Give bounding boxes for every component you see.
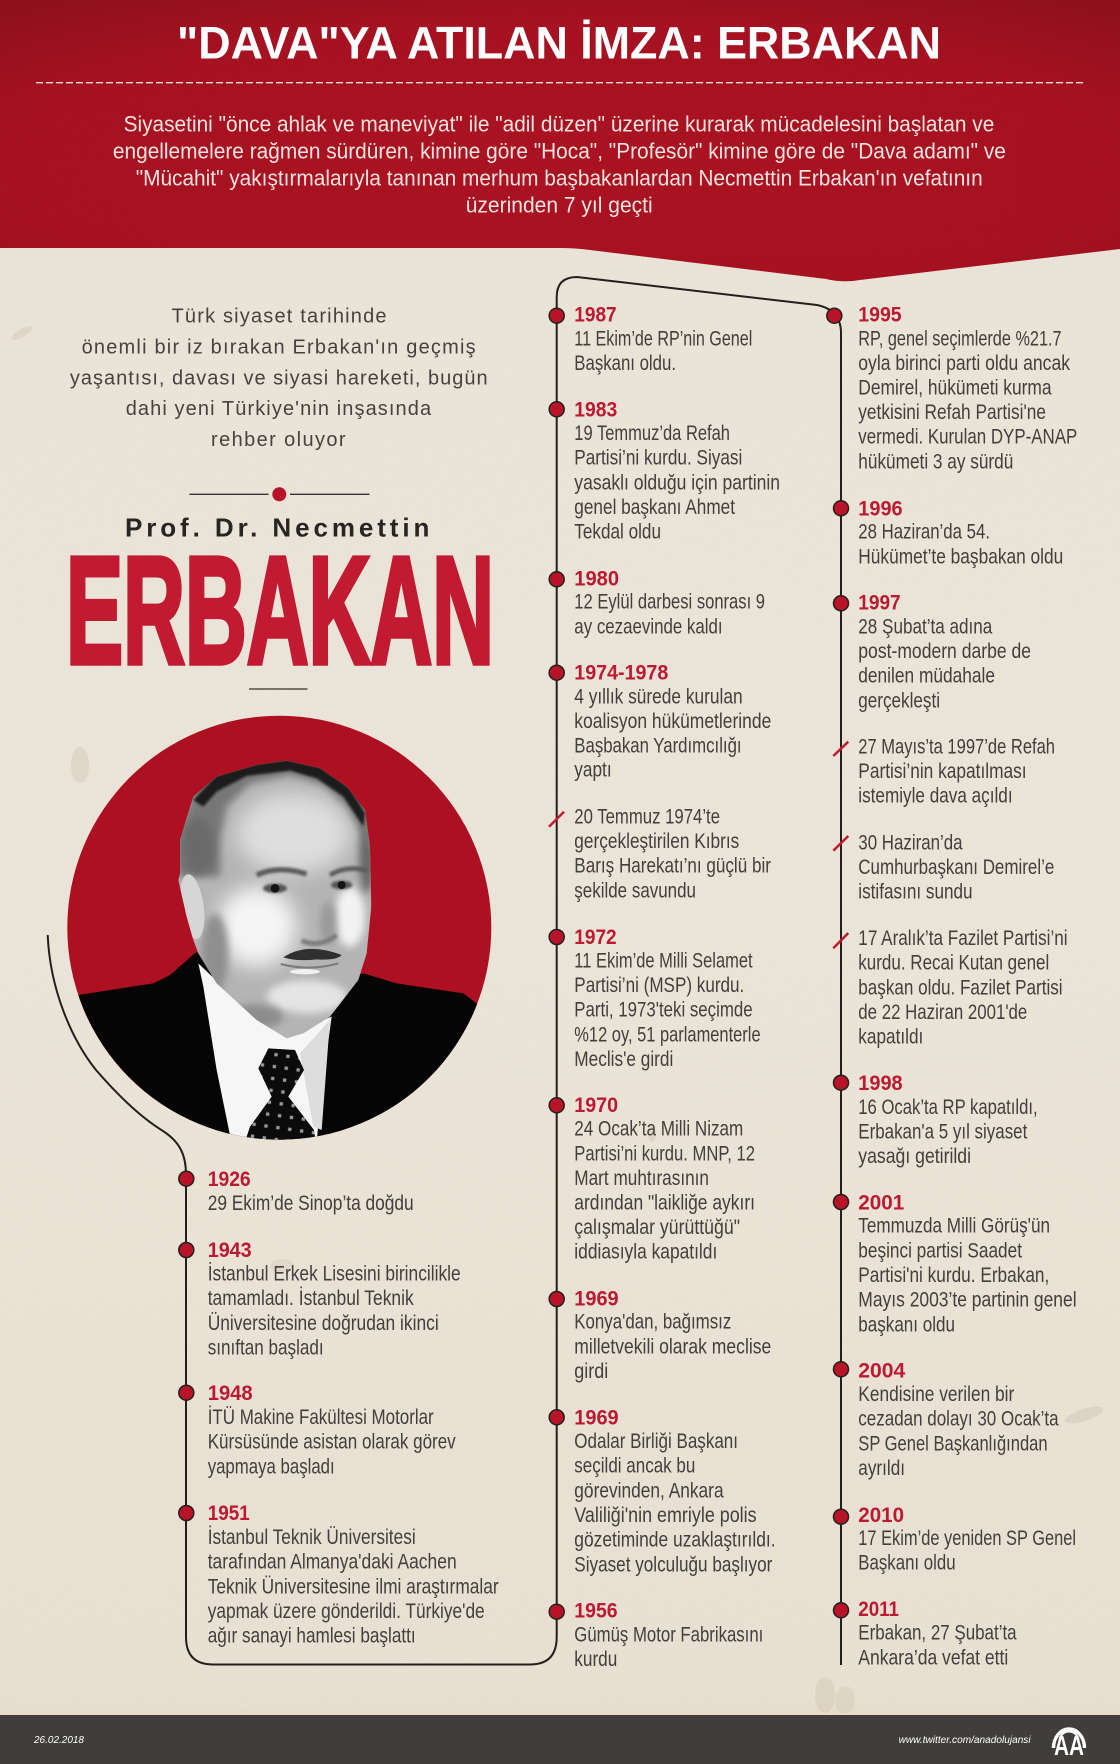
intro statement: Türk siyaset tarihinde (172, 305, 386, 327)
timeline entry: 1951: ağır sanayi hamlesi başlattı (208, 1625, 416, 1648)
timeline entry: 1996: 1996 (858, 497, 903, 520)
timeline entry: 1969 Konya (549, 1288, 771, 1383)
timeline entry: 20 Temmuz 1974: 20 Temmuz 1974’te (574, 805, 720, 828)
timeline entry: 1983: Tekdal oldu (574, 521, 661, 544)
timeline entry: 1995: Demirel, hükümeti kurma (858, 376, 1052, 399)
timeline entry: 1995: oyla birinci parti oldu ancak (858, 352, 1070, 375)
timeline entry: 1980: 1980 (574, 568, 619, 591)
portrait in red circle (67, 716, 492, 1140)
timeline entry: 1983: 19 Temmuz’da Refah (574, 422, 730, 445)
mouth (281, 963, 338, 968)
timeline entry: 1983 (549, 399, 780, 544)
timeline entry: 30 Haziran: 30 Haziran’da (858, 831, 963, 854)
timeline entry: 1948: Kürsüsünde asistan olarak görev (208, 1431, 456, 1454)
timeline entry: 1995: yetkisini Refah Partisi'ne (858, 401, 1046, 424)
ear (180, 874, 204, 939)
timeline entry: 2001: Temmuzda Milli Görüş'ün (858, 1215, 1050, 1238)
panel: timeline column 3 (827, 304, 1077, 1669)
timeline entry: 1995: 1995 (858, 304, 902, 327)
timeline entry: 1970: 24 Ocak’ta Milli Nizam (574, 1118, 743, 1141)
panel: timeline column 1 (179, 1168, 499, 1648)
timeline entry: 1972: 11 Ekim’de Milli Selamet (574, 949, 753, 972)
timeline entry: 1997: 28 Şubat’ta adına (858, 615, 993, 638)
timeline entry: 20 Temmuz 1974: şekilde savundu (574, 879, 696, 902)
timeline entry: 1951: tarafından Almanya'daki Aachen (208, 1551, 457, 1574)
intro statement (70, 305, 488, 451)
timeline entry: 27 Mayıs: istemiyle dava açıldı (858, 785, 1013, 808)
timeline entry: 20 Temmuz 1974 (549, 805, 771, 902)
timeline entry: 1996: 28 Haziran’da 54. (858, 521, 990, 544)
timeline entry: 2010: Başkanı oldu (858, 1552, 956, 1575)
icon: shirt (198, 963, 332, 1143)
intro statement: rehber oluyor (211, 429, 346, 451)
timeline entry: 1972: %12 oy, 51 parlamenterle (574, 1023, 761, 1046)
timeline entry: 1969 Konya: girdi (574, 1360, 608, 1383)
timeline entry: 1972: Partisi’ni (MSP) kurdu. (574, 974, 744, 997)
timeline entry: 2001: Partisi'ni kurdu. Erbakan, (858, 1264, 1049, 1287)
divider with red dot (189, 487, 370, 501)
timeline entry: 1995: RP, genel seçimlerde %21.7 (858, 327, 1062, 350)
timeline entry: 1951: 1951 (208, 1502, 250, 1525)
timeline entry: 17 Aralık: kurdu. Recai Kutan genel (858, 952, 1049, 975)
timeline entry: 1983: 1983 (574, 399, 617, 422)
timeline entry: 1951: Teknik Üniversitesine ilmi araştırmalar (208, 1575, 499, 1598)
timeline entry: 1983: yasaklı olduğu için partinin (574, 471, 780, 494)
timeline entry: 2001: beşinci partisi Saadet (858, 1239, 1022, 1262)
timeline entry: 1951: İstanbul Teknik Üniversitesi (208, 1526, 416, 1549)
icon: tie (246, 1048, 315, 1140)
timeline entry: 1998: yasağı getirildi (858, 1145, 971, 1168)
timeline entry: 1943: sınıftan başladı (208, 1336, 324, 1360)
timeline entry: 1943: Üniversitesine doğrudan ikinci (208, 1312, 439, 1335)
timeline entry: 1980: ay cezaevinde kaldı (574, 615, 723, 638)
timeline entry: 1969 Odalar Birliği: gözetiminde uzaklaştırıldı. (574, 1529, 776, 1552)
timeline entry: 1974-1978 (549, 662, 771, 782)
timeline entry: 27 Mayıs: 27 Mayıs’ta 1997’de Refah (858, 735, 1055, 758)
timeline entry: 1956: kurdu (574, 1648, 617, 1671)
timeline entry: 1972: Parti, 1973'teki seçimde (574, 999, 753, 1022)
timeline entry: 1995 (827, 304, 1077, 473)
intro paragraph (113, 112, 1006, 218)
timeline entry: 1997: denilen müdahale (858, 665, 995, 688)
timeline entry: 17 Aralık: kapatıldı (858, 1026, 923, 1049)
timeline entry: 30 Haziran (833, 831, 1054, 904)
timeline entry: 1969 Konya: 1969 (574, 1288, 619, 1310)
timeline entry: 1987 (549, 304, 752, 375)
timeline entry: 1943: 1943 (208, 1239, 252, 1262)
intro statement: dahi yeni Türkiye'nin inşasında (126, 398, 432, 420)
timeline entry: 1970: iddiasıyla kapatıldı (574, 1241, 717, 1264)
timeline entry: 1974-1978: 4 yıllık sürede kurulan (574, 685, 743, 708)
short rule (249, 688, 308, 690)
timeline connector (48, 277, 841, 1665)
timeline entry: 1987: 1987 (574, 304, 617, 327)
timeline entry: 1972: Meclis'e girdi (574, 1048, 673, 1071)
panel: red header (0, 0, 1120, 285)
timeline entry: 1948: yapmaya başladı (208, 1455, 335, 1478)
timeline entry: 27 Mayıs (833, 735, 1055, 808)
timeline entry: 2001: başkanı oldu (858, 1313, 955, 1336)
timeline entry: 1980 (549, 568, 765, 638)
timeline entry: 1948: 1948 (208, 1382, 253, 1405)
intro paragraph: "Mücahit" yakıştırmalarıyla tanınan merhum başbakanlardan Necmettin Erbakan'ın vefatının (136, 166, 983, 191)
timeline entry: 1998: 1998 (858, 1072, 903, 1095)
timeline entry: 1969 Konya: milletvekili olarak meclise (574, 1335, 771, 1358)
timeline entry: 1956: 1956 (574, 1600, 618, 1623)
intro paragraph: üzerinden 7 yıl geçti (466, 193, 653, 218)
eyes (263, 884, 287, 893)
timeline entry: 1970: Partisi’ni kurdu. MNP, 12 (574, 1142, 755, 1165)
timeline entry: 2004: SP Genel Başkanlığından (858, 1432, 1048, 1455)
timeline entry: 1998 (834, 1072, 1038, 1168)
timeline entry: 1969 Odalar Birliği (549, 1406, 776, 1576)
timeline entry: 1943: İstanbul Erkek Lisesini birincilikle (208, 1262, 461, 1286)
timeline entry: 17 Aralık: başkan oldu. Fazilet Partisi (858, 976, 1063, 999)
timeline entry: 1997: post-modern darbe de (858, 640, 1031, 663)
timeline entry: 1983: Partisi’ni kurdu. Siyasi (574, 447, 742, 470)
timeline entry: 2010: 2010 (858, 1504, 904, 1527)
timeline entry: 1951: yapmak üzere gönderildi. Türkiye'de (208, 1600, 485, 1623)
timeline entry: 1969 Konya: Konya'dan, bağımsız (574, 1311, 731, 1334)
timeline entry: 1969 Odalar Birliği: Valiliği'nin emriyle polis (574, 1504, 757, 1527)
timeline entry: 1974-1978: yaptı (574, 758, 612, 782)
timeline entry: 1974-1978: 1974-1978 (574, 662, 669, 685)
timeline entry: 17 Aralık (833, 927, 1068, 1049)
timeline entry: 1926: 1926 (208, 1168, 251, 1191)
timeline entry: 2011 (834, 1598, 1017, 1669)
timeline entry: 1972: 1972 (574, 926, 617, 949)
timeline entry: 1997: 1997 (858, 592, 901, 614)
timeline entry: 1969 Odalar Birliği: Odalar Birliği Başkanı (574, 1430, 738, 1453)
timeline entry: 1951 (179, 1502, 499, 1648)
timeline entry: 1970: ardından "laikliğe aykırı (574, 1192, 755, 1215)
mustache (283, 949, 342, 960)
intro statement: önemli bir iz bırakan Erbakan'ın geçmiş (82, 336, 476, 358)
timeline entry: 1926 (179, 1168, 414, 1215)
timeline entry: 20 Temmuz 1974: gerçekleştirilen Kıbrıs (574, 830, 739, 853)
timeline entry: 2004: Kendisine verilen bir (858, 1383, 1014, 1406)
timeline entry: 1997: gerçekleşti (858, 689, 940, 712)
intro paragraph: Siyasetini "önce ahlak ve maneviyat" ile "adil düzen" üzerine kurarak mücadelesini başlatan ve (124, 112, 994, 136)
timeline entry: 1969 Odalar Birliği: seçildi ancak bu (574, 1455, 695, 1478)
icon: AA logo: AA (1054, 1730, 1084, 1761)
panel: timeline column 2 (549, 304, 780, 1671)
timeline entry: 20 Temmuz 1974: Barış Harekatı’nı güçlü bir (574, 855, 771, 878)
hair (177, 758, 373, 877)
name: Prof. Dr. Necmettin: Prof. Dr. Necmettin (125, 513, 429, 543)
timeline entry: 1980: 12 Eylül darbesi sonrası 9 (574, 591, 765, 614)
timeline entry: 1987: Başkanı oldu. (574, 352, 676, 375)
timeline entry: 1995: hükümeti 3 ay sürdü (858, 450, 1013, 473)
timeline entry: 1956: Gümüş Motor Fabrikasını (574, 1623, 763, 1646)
timeline entry: 1996 (834, 497, 1063, 568)
timeline entry: 1970 (549, 1094, 755, 1264)
timeline entry: 2004: 2004 (858, 1360, 906, 1383)
eyebrows (257, 870, 307, 875)
timeline entry: 1948: İTÜ Makine Fakültesi Motorlar (208, 1406, 434, 1429)
timeline entry: 1997 (834, 592, 1031, 712)
icon: suit (78, 952, 477, 1140)
timeline entry: 1943: tamamladı. İstanbul Teknik (208, 1287, 414, 1310)
timeline entry: 1974-1978: Başbakan Yardımcılığı (574, 735, 742, 758)
timeline entry: 1956 (549, 1600, 763, 1671)
timeline entry: 1948 (179, 1382, 456, 1478)
timeline entry: 2010 (834, 1504, 1076, 1575)
timeline entry: 1943 (179, 1239, 461, 1360)
timeline entry: 1998: Erbakan'a 5 yıl siyaset (858, 1120, 1027, 1143)
timeline entry: 2011: Ankara’da vefat etti (858, 1646, 1008, 1669)
timeline entry: 1972 (549, 926, 761, 1071)
date: 26.02.2018 (33, 1735, 84, 1746)
dashed divider (36, 82, 1084, 84)
panel: footer (0, 1715, 1120, 1764)
timeline entry: 1969 Odalar Birliği: Siyaset yolculuğu başlıyor (574, 1553, 772, 1576)
timeline entry: 30 Haziran: Cumhurbaşkanı Demirel’e (858, 856, 1054, 879)
icon: head (173, 757, 377, 1043)
timeline entry: 1969 Odalar Birliği: 1969 (574, 1406, 619, 1429)
timeline entry: 1970: çalışmalar yürüttüğü" (574, 1216, 740, 1239)
timeline entry: 1996: Hükümet’te başbakan oldu (858, 545, 1063, 568)
timeline entry: 2011: 2011 (858, 1598, 899, 1621)
timeline entry: 1970: 1970 (574, 1094, 618, 1117)
name: ERBAKAN: ERBAKAN (66, 525, 494, 696)
timeline entry: 2004 (834, 1360, 1059, 1480)
timeline entry: 1983: genel başkanı Ahmet (574, 496, 735, 519)
intro paragraph: engellemelere rağmen sürdüren, kimine göre "Hoca", "Profesör" kimine göre de "Dava adamı" ve (113, 139, 1006, 164)
timeline entry: 2011: Erbakan, 27 Şubat’ta (858, 1622, 1017, 1645)
timeline entry: 30 Haziran: istifasını sundu (858, 881, 973, 904)
timeline entry: 1970: Mart muhtırasının (574, 1167, 709, 1190)
timeline entry: 1974-1978: koalisyon hükümetlerinde (574, 710, 771, 733)
timeline entry: 1987: 11 Ekim’de RP’nin Genel (574, 327, 752, 350)
timeline entry: 1926: 29 Ekim’de Sinop’ta doğdu (208, 1192, 414, 1215)
timeline entry: 2004: cezadan dolayı 30 Ocak’ta (858, 1408, 1059, 1431)
title: "DAVA"YA ATILAN İMZA: ERBAKAN (177, 18, 941, 68)
timeline entry: 1998: 16 Ocak’ta RP kapatıldı, (858, 1096, 1038, 1119)
intro statement: yaşantısı, davası ve siyasi hareketi, bugün (70, 367, 488, 389)
timeline entry: 2001: Mayıs 2003’te partinin genel (858, 1289, 1077, 1312)
timeline entry: 17 Aralık: 17 Aralık’ta Fazilet Partisi’ni (858, 927, 1068, 950)
timeline entry: 2001 (834, 1191, 1077, 1336)
twitter address: www.twitter.com/anadolujansi (899, 1735, 1031, 1746)
timeline entry: 17 Aralık: de 22 Haziran 2001'de (858, 1001, 1027, 1024)
timeline entry: 2001: 2001 (858, 1191, 905, 1214)
timeline entry: 27 Mayıs: Partisi’nin kapatılması (858, 760, 1027, 783)
nose (302, 935, 337, 943)
timeline entry: 2004: ayrıldı (858, 1457, 905, 1480)
timeline entry: 1969 Odalar Birliği: görevinden, Ankara (574, 1479, 724, 1502)
